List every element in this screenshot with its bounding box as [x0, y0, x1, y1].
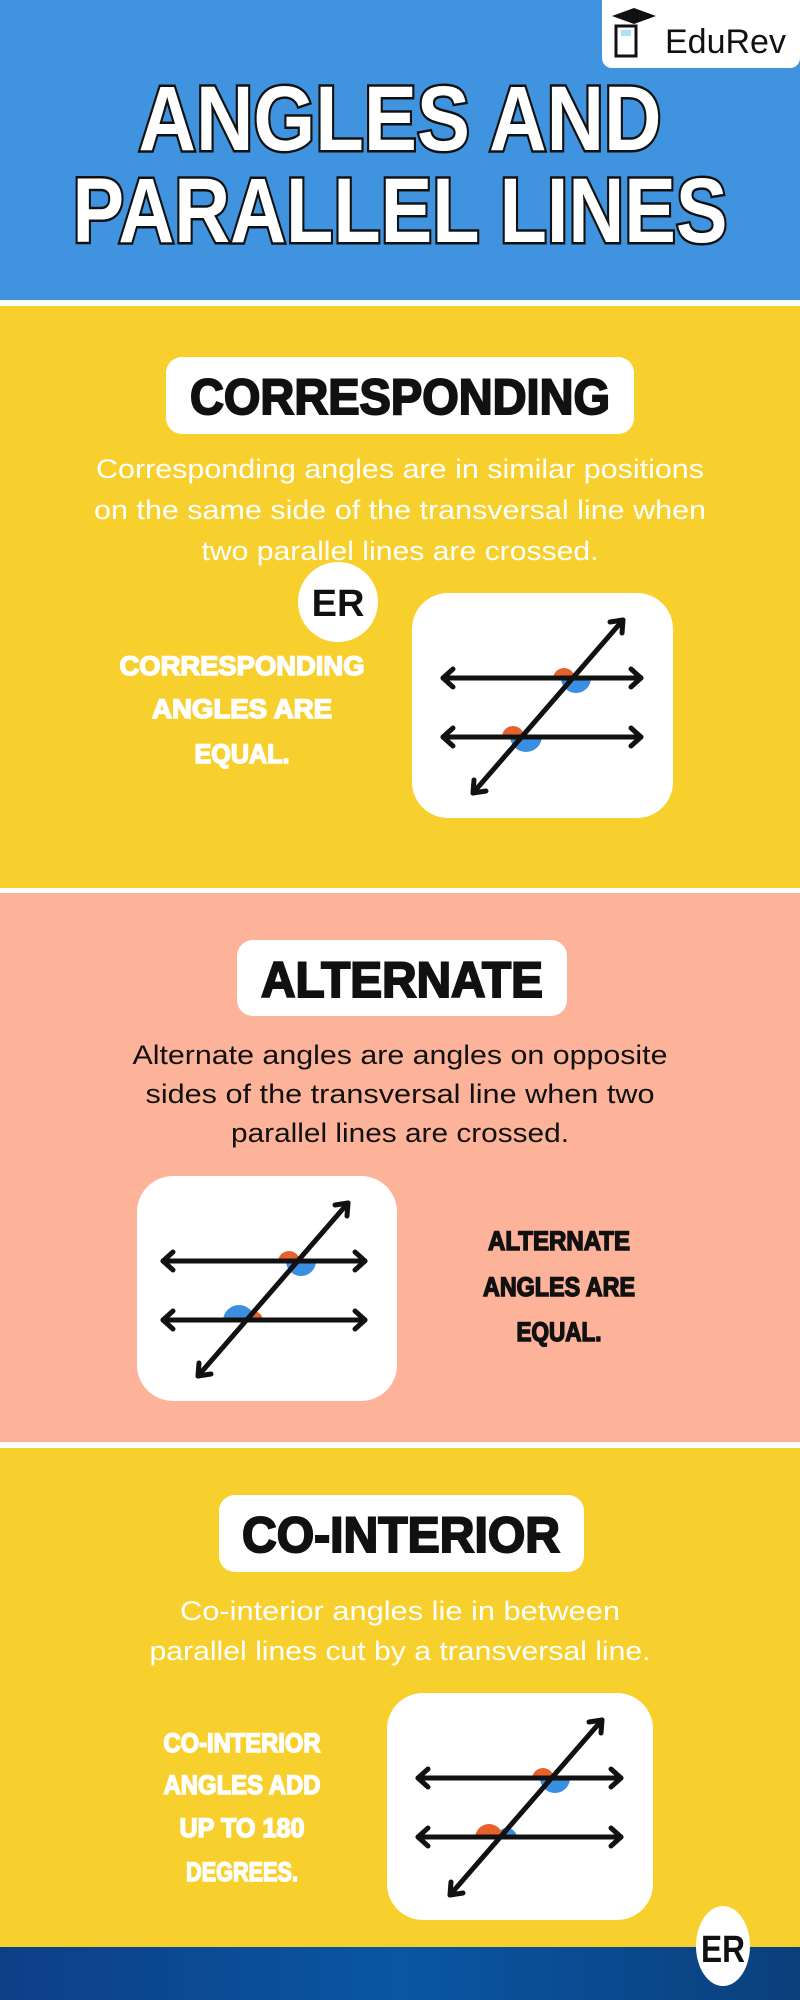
title: [72, 68, 728, 262]
diagram: alternate angles: [137, 1176, 397, 1401]
text: alternate definition: sides of the transversal line when two: [146, 1079, 654, 1109]
callout: alternate angles are equal: [483, 1226, 635, 1347]
icon: ER badge: ER: [312, 583, 364, 625]
callout: alternate angles are equal: ANGLES ARE: [483, 1272, 635, 1302]
callout: co-interior add to 180: UP TO 180: [180, 1813, 304, 1843]
text: corresponding definition: [94, 454, 706, 566]
text: corresponding definition: on the same side of the transversal line when: [94, 495, 706, 525]
callout: co-interior add to 180: [164, 1728, 320, 1887]
heading: alternate: [237, 940, 567, 1016]
title: ANGLES AND: [138, 68, 662, 170]
text: alternate definition: Alternate angles are angles on opposite: [132, 1040, 668, 1070]
icon: ER badge bottom: ER: [701, 1929, 745, 1971]
callout: corresponding angles are equal: ANGLES ARE: [152, 694, 332, 724]
text: corresponding definition: Corresponding angles are in similar positions: [96, 454, 704, 484]
heading: corresponding: [166, 357, 634, 434]
diagram: co-interior angles: [387, 1693, 653, 1920]
panel: alternate: [0, 893, 800, 1442]
footer band: [0, 1947, 800, 2000]
heading: alternate: ALTERNATE: [261, 952, 543, 1008]
callout: corresponding angles are equal: CORRESPONDING: [120, 651, 364, 681]
heading: co-interior: CO-INTERIOR: [242, 1507, 560, 1563]
callout: alternate angles are equal: EQUAL.: [516, 1317, 602, 1347]
heading: corresponding: CORRESPONDING: [190, 369, 610, 425]
text: alternate definition: parallel lines are crossed.: [231, 1118, 569, 1148]
callout: co-interior add to 180: ANGLES ADD: [164, 1770, 320, 1800]
callout: co-interior add to 180: CO-INTERIOR: [164, 1728, 320, 1758]
header band: [0, 0, 800, 300]
callout: alternate angles are equal: ALTERNATE: [488, 1226, 630, 1256]
text: co-interior definition: parallel lines cut by a transversal line.: [150, 1636, 650, 1666]
panel: co-interior: [0, 1448, 800, 1948]
panel: corresponding: [0, 306, 800, 888]
diagram: corresponding angles: [412, 593, 673, 818]
text: corresponding definition: two parallel lines are crossed.: [202, 536, 598, 566]
icon: ER badge bottom: [696, 1906, 750, 1986]
callout: co-interior add to 180: DEGREES.: [186, 1857, 298, 1887]
text: co-interior definition: [150, 1596, 650, 1666]
callout: corresponding angles are equal: EQUAL.: [194, 739, 290, 769]
text: alternate definition: [132, 1040, 668, 1148]
callout: corresponding angles are equal: [120, 651, 364, 769]
logo: EduRev: EduRev: [665, 23, 786, 61]
logo: EduRev: [602, 0, 800, 68]
icon: ER badge: [298, 562, 378, 642]
heading: co-interior: [219, 1495, 584, 1572]
text: co-interior definition: Co-interior angles lie in between: [180, 1596, 620, 1626]
